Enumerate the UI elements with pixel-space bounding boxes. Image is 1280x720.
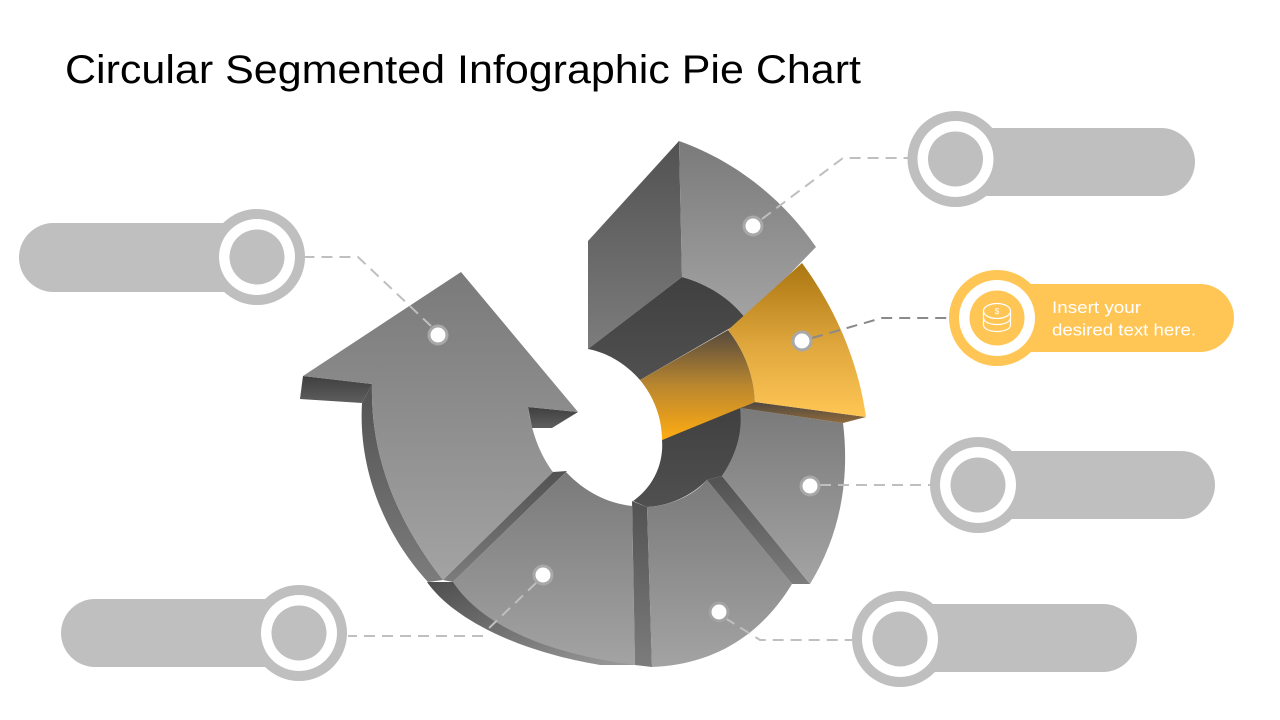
callout: bottom right	[852, 591, 1137, 687]
callout: left	[19, 209, 305, 305]
callout: bottom left	[61, 585, 347, 681]
segment: bottom left	[427, 472, 652, 667]
icon: coins	[984, 304, 1010, 332]
segment: arrow	[300, 272, 578, 582]
segment: bottom right	[647, 476, 810, 667]
title: Circular Segmented Infographic Pie Chart	[65, 48, 861, 92]
callout text: Insert your	[1052, 298, 1141, 317]
segment: right	[722, 408, 845, 584]
callout: right	[930, 437, 1215, 533]
callout text: desired text here.	[1052, 320, 1196, 340]
icon: coins: $	[995, 307, 1000, 316]
3D segmented pie chart	[300, 141, 866, 667]
connector lines	[305, 158, 948, 640]
segment: highlighted orange	[640, 263, 866, 440]
marker dots	[429, 217, 819, 621]
segment: top	[588, 141, 816, 380]
callout: orange highlighted	[949, 270, 1234, 366]
callout: top right	[908, 111, 1195, 207]
inner wall	[633, 406, 742, 507]
